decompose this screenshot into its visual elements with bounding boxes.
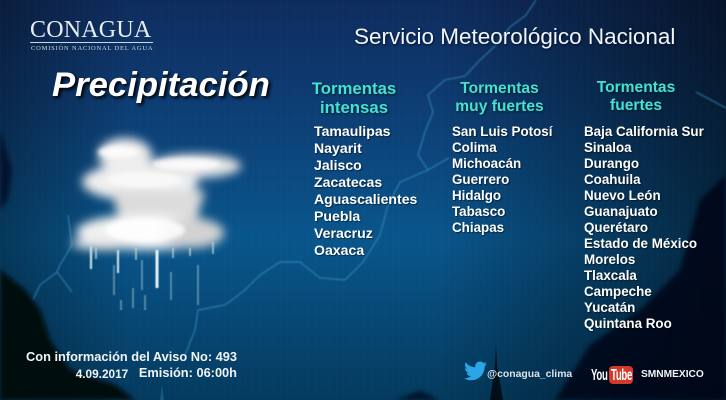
heading: intensas [312,79,398,117]
heading: Servicio Meteorológico Nacional: Servicio Meteorológico Nacional [354,24,675,49]
list: muy fuertes states: Chiapas [452,220,504,235]
list: intensas states: Tamaulipas [314,122,390,138]
list: fuertes states: Estado de México [584,236,697,251]
notice info [26,349,237,381]
heading: intensas: Tormentas [312,79,396,98]
twitter handle: @conagua_clima [487,369,572,380]
list: fuertes states: Durango [584,156,639,171]
list: muy fuertes states: Michoacán [452,156,521,171]
list: muy fuertes states: Hidalgo [452,188,501,203]
notice info: 4.09.2017 Emisión: 06:00h [76,365,237,381]
heading: intensas: intensas [320,98,388,117]
list: fuertes states: Tlaxcala [584,268,637,283]
heading: muy fuertes [455,80,545,116]
icon: YouTube logo: You [591,367,608,384]
list: fuertes states: Querétaro [584,220,648,235]
list: fuertes states: Quintana Roo [584,316,672,331]
list: fuertes states [584,124,705,332]
list: muy fuertes states: Tabasco [452,204,505,219]
heading: fuertes [596,79,676,114]
icon: YouTube logo: Tube [611,367,632,384]
list: intensas states: Jalisco [314,156,362,172]
list: intensas states: Puebla [314,208,360,224]
list: muy fuertes states: San Luis Potosí [452,124,552,139]
list: intensas states: Zacatecas [314,174,382,190]
list: fuertes states: Yucatán [584,300,635,315]
icon: YouTube logo [591,366,633,384]
list: fuertes states: Coahuila [584,172,641,187]
list: fuertes states: Baja California Sur [584,124,704,139]
icon: twitter bird [464,362,487,380]
notice info: Con información del Aviso No: 493 [26,349,237,364]
logo: CONAGUA: CONAGUA [30,17,151,43]
list: muy fuertes states: Guerrero [452,172,509,187]
logo: CONAGUA: COMISIÓN NACIONAL DEL AGUA [31,45,153,52]
list: fuertes states: Sinaloa [584,140,632,155]
title: Precipitación: Precipitación [52,66,270,104]
list: fuertes states: Campeche [584,284,652,299]
heading: fuertes: Tormentas [597,79,675,96]
heading: fuertes: fuertes [610,97,662,114]
list: intensas states: Nayarit [314,140,362,156]
list: fuertes states: Nuevo León [584,188,661,203]
list: fuertes states: Morelos [584,252,635,267]
list: intensas states: Oaxaca [314,242,364,258]
icon: rain cloud [66,130,248,310]
column: Tormentas fuertes [584,79,705,332]
youtube channel: SMNMEXICO [641,369,704,380]
heading: muy fuertes: muy fuertes [455,98,544,115]
column: Tormentas intensas [312,79,418,258]
list: intensas states [314,122,418,258]
list: fuertes states: Guanajuato [584,204,658,219]
steeple silhouette [490,345,503,400]
list: muy fuertes states: Colima [452,140,497,155]
list: muy fuertes states [452,124,554,236]
list: intensas states: Veracruz [314,224,373,240]
list: intensas states: Aguascalientes [314,190,417,206]
column: Tormentas muy fuertes [452,80,554,236]
heading: muy fuertes: Tormentas [460,80,539,97]
